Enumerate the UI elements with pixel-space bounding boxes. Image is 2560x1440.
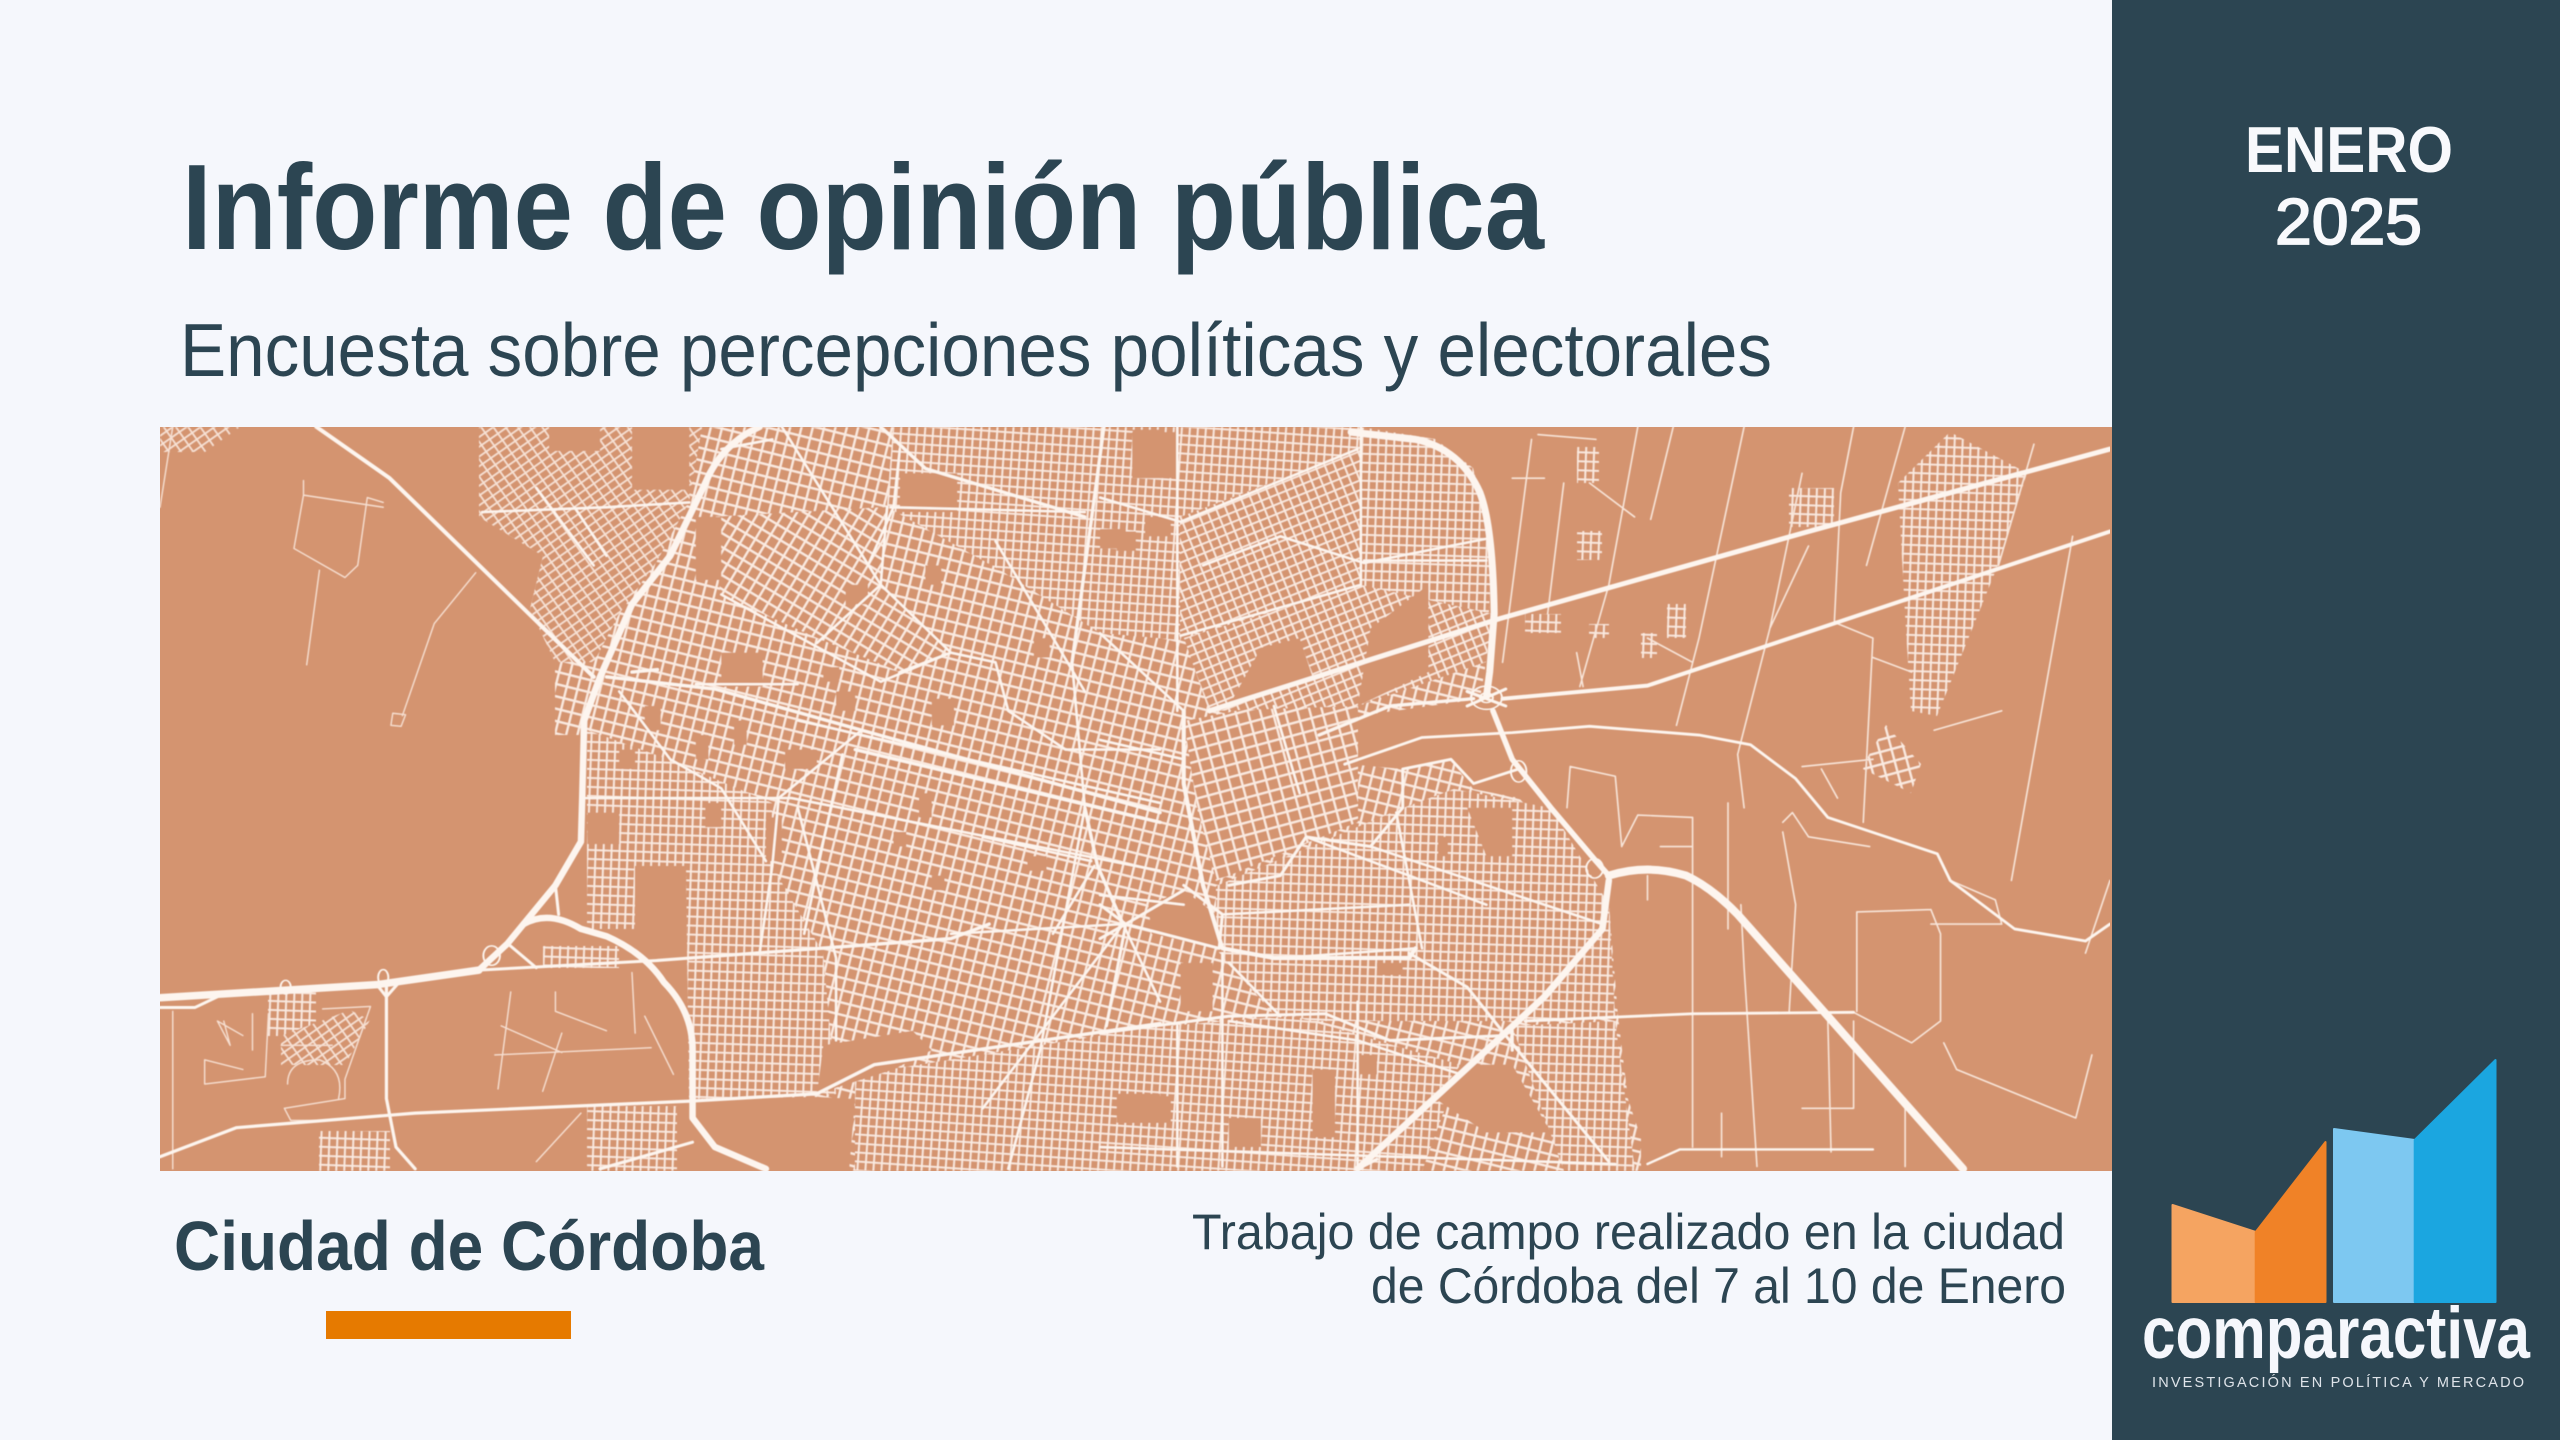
north west diagonal highway [316, 427, 594, 677]
motorway loops [281, 946, 500, 997]
city arterial streets [1100, 427, 1873, 1166]
date label [2245, 113, 2453, 258]
south connector [386, 987, 415, 1169]
map of Córdoba [160, 427, 2112, 1171]
eastern highway one [1209, 449, 2110, 711]
city name: Ciudad de Córdoba [174, 1207, 765, 1285]
open blocks west half [549, 427, 1160, 1123]
road network west half [160, 427, 1160, 1169]
side panel [2112, 0, 2560, 1440]
fieldwork note: Trabajo de campo realizado en la ciudad [1192, 1204, 2065, 1260]
city arterial streets [482, 427, 1160, 1169]
date label: ENERO [2245, 113, 2453, 186]
west ring road [479, 427, 760, 970]
urban street grid [160, 427, 2027, 1171]
open blocks east half [1100, 432, 1551, 1147]
big south eastern motorway [1609, 870, 1963, 1169]
north east ring road [1351, 432, 1494, 696]
logo mark: bars [2172, 1060, 2496, 1302]
interchange [1467, 686, 1603, 878]
eastern highway two [1503, 531, 2110, 699]
west motorway [160, 970, 479, 998]
south east ring road [1493, 711, 1609, 876]
central corridor [1184, 711, 1416, 958]
western thin rural lines [160, 427, 673, 1169]
orange accent bar [326, 1311, 571, 1339]
rivers and main avenues [1100, 726, 2110, 1162]
thick arterial avenues [606, 427, 1160, 960]
southern road [160, 1023, 1160, 1157]
title: Informe de opinión pública [182, 139, 1545, 275]
diagonal motorway [1358, 880, 1609, 1169]
logo: comparactiva [2142, 1060, 2531, 1391]
map artwork [160, 427, 2110, 1171]
subtitle: Encuesta sobre percepciones políticas y electorales [180, 308, 1772, 392]
fieldwork note: de Córdoba del 7 al 10 de Enero [1371, 1258, 2066, 1314]
road network east half [1100, 427, 2110, 1169]
eastern thin rural lines [1503, 427, 2110, 1166]
south west ring road [524, 918, 766, 1169]
fieldwork note [1192, 1204, 2066, 1314]
date label: 2025 [2275, 185, 2422, 258]
logo tagline: INVESTIGACIÓN EN POLÍTICA Y MERCADO [2152, 1374, 2524, 1391]
